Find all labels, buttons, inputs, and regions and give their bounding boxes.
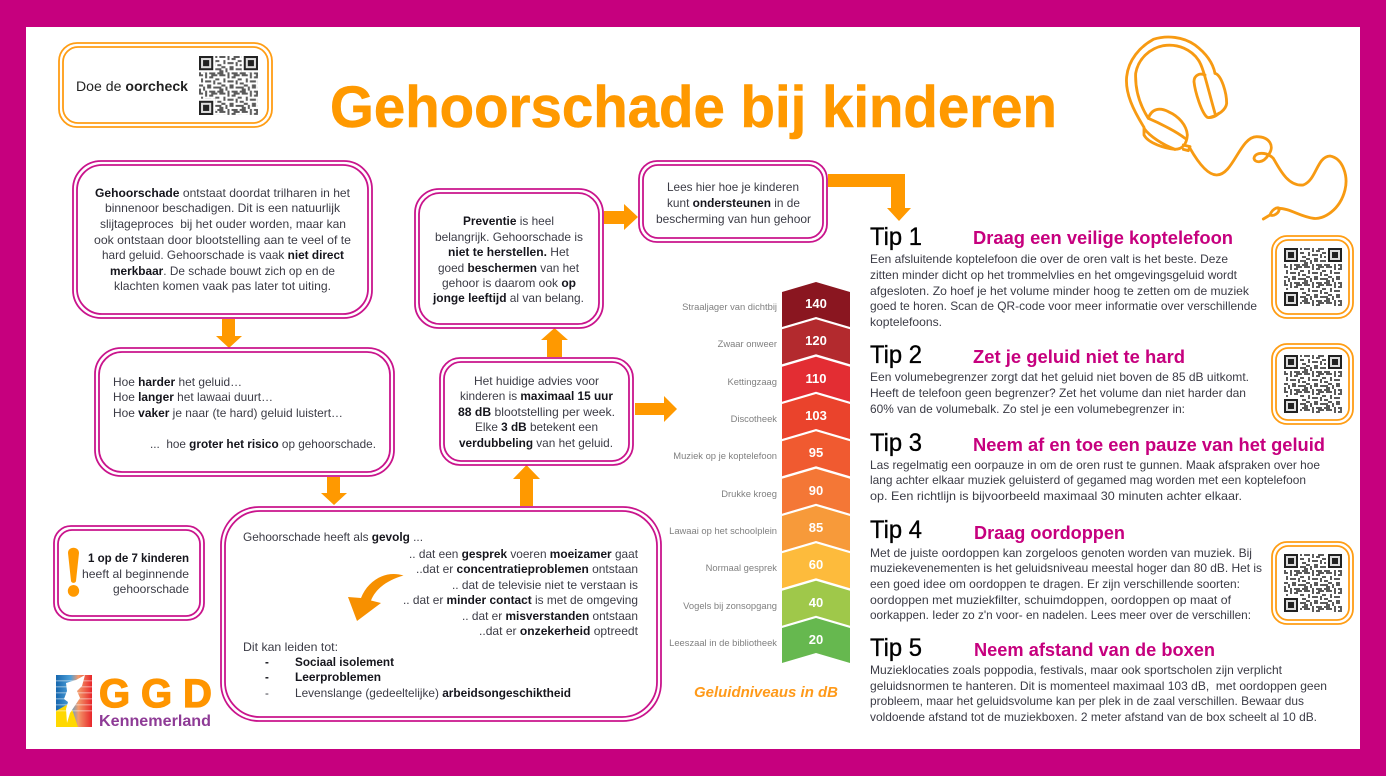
- arrow: preventie naar ondersteunen: [604, 204, 638, 230]
- segment 60: [706, 543, 850, 588]
- QR panel tip 2: [1272, 344, 1353, 424]
- oorcheck text: Doe de oorcheck: [76, 78, 188, 94]
- logo: GGD Kennemerland: GGD: [99, 672, 212, 716]
- tip 4: Met de juiste oordoppen kan zorgeloos genoten worden van muziek. Bij: [870, 547, 1252, 560]
- statistic text: heeft al beginnende: [82, 568, 189, 581]
- segment 90: 90: [809, 483, 823, 498]
- risico text: [113, 376, 376, 451]
- tip 4: Draag oordoppen: [974, 523, 1125, 543]
- statistic text: [82, 552, 189, 596]
- tip 4: [870, 516, 1262, 622]
- tip 5: geluidsnormen te hanteren. Dit is momenteel maximaal 103 dB, met oordoppen geen: [870, 680, 1327, 693]
- tip 2: Tip 2: [870, 341, 922, 369]
- panel: gehoorschade uitleg: [73, 161, 372, 318]
- tip 1: afgesloten. Zo hoef je het volume minder hoog te zetten om de muziek: [870, 285, 1249, 298]
- arrow: curved: [348, 574, 404, 621]
- segment 120: 120: [805, 333, 827, 348]
- segment 95: Muziek op je koptelefoon: [673, 450, 777, 461]
- tip 2: 60% van de volumebalk. Zo stel je een volumebegrenzer in:: [870, 403, 1185, 416]
- tip 1: koptelefoons.: [870, 316, 942, 329]
- segment 95: 95: [809, 445, 823, 460]
- advies text: verdubbeling van het geluid.: [459, 437, 613, 450]
- tip 2: Zet je geluid niet te hard: [973, 347, 1185, 367]
- tip 1: zitten minder dicht op het trommelvlies en het omgevingsgeluid wordt: [870, 269, 1238, 282]
- arrow: uitleg naar risico: [216, 319, 242, 348]
- tip 5: probleem, maar het geluidsvolume kan per plek in de zaal verschillen. Bewaar dus: [870, 695, 1304, 708]
- segment 140: [682, 282, 850, 327]
- segment 103: [731, 394, 850, 439]
- gevolgen text: Levenslange (gedeeltelijke) arbeidsongeschiktheid: [295, 687, 571, 700]
- risico text: Hoe harder het geluid…: [113, 376, 242, 389]
- tip 1: goed te horen. Scan de QR-code voor meer informatie over verschillende: [870, 300, 1257, 313]
- risico text: ... hoe groter het risico op gehoorschade.: [150, 438, 376, 451]
- uitleg text: binnenoor beschadigen. Dit is een natuurlijk: [105, 202, 340, 215]
- statistic text: 1 op de 7 kinderen: [88, 552, 189, 565]
- advies text: kinderen is maximaal 15 uur: [460, 390, 613, 403]
- advies text: Het huidige advies voor: [474, 375, 599, 388]
- segment 85: Lawaai op het schoolplein: [669, 525, 777, 536]
- preventie text: Preventie is heel: [463, 215, 554, 228]
- risico text: Hoe langer het lawaai duurt…: [113, 391, 273, 404]
- icon: exclamation mark: [68, 548, 79, 597]
- gevolgen text: -: [265, 656, 269, 669]
- tip 1: [870, 223, 1257, 329]
- uitleg text: Gehoorschade ontstaat doordat trilharen in het: [95, 187, 351, 200]
- segment 20: 20: [809, 632, 823, 647]
- segment 40: Vogels bij zonsopgang: [683, 600, 777, 611]
- gevolgen text: .. dat de televisie niet te verstaan is: [452, 579, 638, 592]
- segment 90: [721, 469, 850, 514]
- statistic text: gehoorschade: [113, 583, 189, 596]
- arrow: ondersteunen naar tips: [828, 174, 911, 221]
- segment 85: [669, 506, 850, 551]
- tip 2: [870, 341, 1249, 416]
- gevolgen text: Sociaal isolement: [295, 656, 394, 669]
- ondersteunen text: bescherming van hun gehoor: [656, 213, 811, 226]
- tip 5: Neem afstand van de boxen: [974, 640, 1215, 660]
- advies text: Elke 3 dB betekent een: [475, 421, 598, 434]
- preventie text: belangrijk. Gehoorschade is: [435, 231, 583, 244]
- segment 110: 110: [806, 371, 826, 386]
- uitleg text: hard geluid. Gehoorschade is vaak niet direct: [102, 249, 344, 262]
- icon: headphones: [1126, 37, 1346, 219]
- preventie text: niet te herstellen. Het: [448, 246, 570, 259]
- segment 103: 103: [805, 408, 827, 423]
- segment 85: 85: [809, 520, 823, 535]
- panel: oorcheck: [59, 43, 272, 127]
- tip 3: op. Een richtlijn is bijvoorbeeld maximaal 30 minuten achter elkaar.: [870, 490, 1242, 503]
- icon: QR code oorcheck: [199, 56, 258, 115]
- tip 1: Een afsluitende koptelefoon die over de oren valt is het beste. Deze: [870, 253, 1228, 266]
- preventie text: gehoor is daarom ook op: [442, 277, 576, 290]
- preventie text: jonge leeftijd al van belang.: [432, 292, 584, 305]
- ondersteunen text: [656, 181, 811, 226]
- gevolgen text: -: [265, 671, 269, 684]
- gevolgen text: .. dat er misverstanden ontstaan: [462, 610, 638, 623]
- panel: risico: [95, 348, 394, 476]
- logo: GGD Kennemerland: [56, 672, 212, 730]
- segment 103: Discotheek: [731, 413, 777, 424]
- arrow: advies naar geluidsniveaus: [635, 396, 677, 422]
- segment 20: [669, 618, 850, 663]
- segment 60: Normaal gesprek: [706, 562, 777, 573]
- segment 20: Leeszaal in de bibliotheek: [669, 637, 777, 648]
- uitleg text: klachten komen vaak pas later tot uiting.: [114, 280, 331, 293]
- risico text: Hoe vaker je naar (te hard) geluid luistert…: [113, 407, 343, 420]
- tip 5: [870, 634, 1327, 724]
- uitleg text: [94, 187, 351, 293]
- tip 2: Een volumebegrenzer zorgt dat het geluid niet boven de 85 dB uitkomt.: [870, 371, 1249, 384]
- segment 110: Kettingzaag: [727, 376, 777, 387]
- segment 40: 40: [809, 595, 823, 610]
- panel: preventie: [415, 189, 603, 328]
- panel: 1 op 7: [54, 526, 204, 620]
- tip 4: muziekevenementen is het geluidsniveau meestal hoger dan 80 dB. Het is: [870, 562, 1262, 575]
- gevolgen text: -: [265, 687, 269, 700]
- advies text: [458, 375, 615, 450]
- ondersteunen text: Lees hier hoe je kinderen: [667, 181, 799, 194]
- title: Gehoorschade bij kinderen: [330, 75, 1057, 140]
- arrow: risico naar gevolgen: [321, 477, 347, 505]
- gevolgen text: ..dat er concentratieproblemen ontstaan: [416, 563, 638, 576]
- advies text: 88 dB blootstelling per week.: [458, 406, 615, 419]
- tip 1: Draag een veilige koptelefoon: [973, 228, 1233, 248]
- preventie text: [432, 215, 584, 305]
- panel: ondersteunen: [639, 161, 827, 242]
- ondersteunen text: kunt ondersteunen in de: [667, 197, 800, 210]
- segment 90: Drukke kroeg: [721, 488, 777, 499]
- QR panel tip 4: [1272, 542, 1353, 624]
- segment 60: 60: [809, 557, 823, 572]
- panel: advies: [440, 358, 633, 465]
- tip 4: oorkappen. Ieder zo z'n voor- en nadelen. Lees meer over de verschillen:: [870, 609, 1251, 622]
- tip 5: Tip 5: [870, 634, 922, 662]
- gevolgen text: .. dat een gesprek voeren moeizamer gaat: [409, 548, 639, 561]
- tip 3: Neem af en toe een pauze van het geluid: [973, 435, 1325, 455]
- uitleg text: merkbaar. De schade bouwt zich op en de: [110, 265, 335, 278]
- tip 3: Las regelmatig een oorpauze in om de oren rust te gunnen. Maak afspraken over hoe: [870, 459, 1320, 472]
- gevolgen text: ..dat er onzekerheid optreedt: [479, 625, 639, 638]
- logo: GGD Kennemerland: Kennemerland: [99, 713, 211, 730]
- arrow: gevolgen naar advies: [513, 465, 540, 506]
- segment 120: Zwaar onweer: [718, 338, 777, 349]
- preventie text: goed beschermen van het: [438, 262, 580, 275]
- chart caption: Geluidniveaus in dB: [694, 684, 838, 701]
- segment 140: Straaljager van dichtbij: [682, 301, 777, 312]
- tip 3: lang achter elkaar muziek geluisterd of gegamed mag worden met een koptelefoon: [870, 474, 1306, 487]
- segment 120: [718, 319, 850, 364]
- tip 5: voldoende afstand tot de muziekboxen. 2 meter afstand van de box scheelt al 10 dB.: [870, 711, 1317, 724]
- gevolgen text: Dit kan leiden tot:: [243, 641, 338, 654]
- chart: geluidsniveaus: [669, 282, 850, 701]
- tip 5: Muzieklocaties zoals poppodia, festivals, maar ook sportscholen zijn verplicht: [870, 664, 1283, 677]
- gevolgen text: .. dat er minder contact is met de omgeving: [403, 594, 638, 607]
- tip 4: een goed idee om oordoppen te dragen. Er zijn verschillende soorten:: [870, 578, 1240, 591]
- gevolgen text: [243, 531, 639, 700]
- tip 4: Tip 4: [870, 516, 922, 544]
- uitleg text: ook ontstaan door blootstelling aan te veel of te: [94, 234, 351, 247]
- arrow: advies naar preventie: [541, 328, 568, 357]
- segment 40: [683, 581, 850, 626]
- uitleg text: slijtageproces bij het ouder worden, maar kan: [100, 218, 346, 231]
- segment 140: 140: [805, 296, 827, 311]
- tip 4: oordoppen met muziekfilter, schuimdoppen, oordoppen op maat of: [870, 594, 1232, 607]
- tip 1: Tip 1: [870, 223, 922, 251]
- panel: gevolgen: [221, 507, 661, 721]
- QR panel tip 1: [1272, 236, 1353, 318]
- tip 2: Heeft de telefoon geen begrenzer? Zet het volume dan niet harder dan: [870, 387, 1246, 400]
- segment 95: [673, 431, 850, 476]
- gevolgen text: Gehoorschade heeft als gevolg ...: [243, 531, 423, 544]
- gevolgen text: Leerproblemen: [295, 671, 381, 684]
- tip 3: [870, 429, 1325, 503]
- tip 3: Tip 3: [870, 429, 922, 457]
- segment 110: [727, 357, 850, 402]
